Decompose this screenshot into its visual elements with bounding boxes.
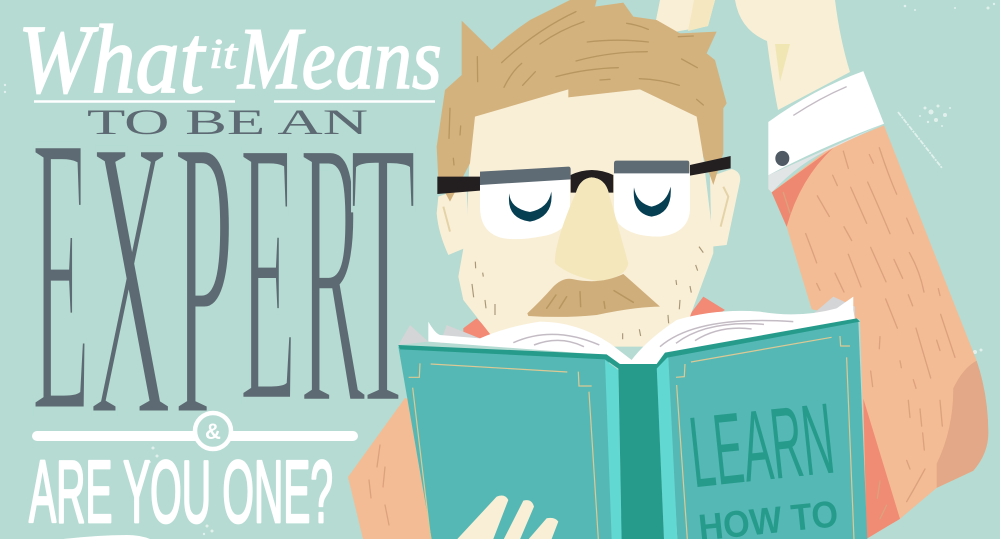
hair strokes: [449, 12, 703, 165]
gold frame lines: [409, 336, 854, 539]
subtitle: to be an: TO BE AN: [87, 102, 368, 142]
nose: [555, 177, 628, 282]
cuff button: [775, 151, 789, 166]
title: what it means: What: [18, 6, 206, 114]
infographic header illustration: ARE YOU ONE?: [29, 442, 333, 539]
open book: [398, 297, 867, 539]
title underlines: [34, 100, 435, 103]
page lines: [513, 321, 793, 347]
elbow shading: [937, 361, 988, 488]
shirt cuff: [768, 71, 884, 192]
closed eyes: [509, 187, 671, 222]
title: expert: X: [90, 54, 171, 503]
title: what it means: it: [209, 32, 238, 78]
sleeve shadow: [772, 148, 833, 227]
left cover: [398, 347, 623, 539]
book title: learn how to: LEARN: [685, 383, 839, 509]
title: expert: R: [300, 59, 366, 486]
title: expert: T: [350, 60, 416, 486]
hair: [437, 0, 727, 202]
glasses: [437, 156, 731, 239]
ampersand divider: [37, 413, 353, 449]
spine: [618, 365, 664, 539]
stubble: [472, 247, 703, 339]
ampersand divider: &: [205, 419, 221, 444]
title: expert: E: [32, 49, 90, 498]
title: expert: [32, 49, 416, 503]
paper texture streak: [898, 112, 942, 168]
arm hair strokes: [783, 148, 955, 519]
hand holding book: [453, 496, 558, 539]
cropped lettering at bottom edge: [63, 535, 150, 539]
title: expert: E: [240, 60, 296, 484]
face: [458, 89, 713, 347]
right cover: [667, 320, 867, 539]
lower sleeve: [863, 399, 900, 539]
left arm: [348, 398, 432, 539]
title: what it means: [18, 6, 442, 114]
title: what it means: Means: [237, 9, 442, 107]
title: expert: P: [174, 55, 234, 503]
grey under pages: [398, 297, 855, 345]
head: [437, 0, 740, 347]
ears: [437, 169, 740, 255]
white pages: [428, 297, 855, 368]
moustache: [527, 274, 660, 317]
raised hand and finger: [653, 0, 850, 110]
inner spine strips: [605, 357, 677, 539]
collar: [463, 297, 725, 340]
cover top edge: [398, 318, 860, 369]
raised forearm and sleeve: [772, 125, 988, 539]
